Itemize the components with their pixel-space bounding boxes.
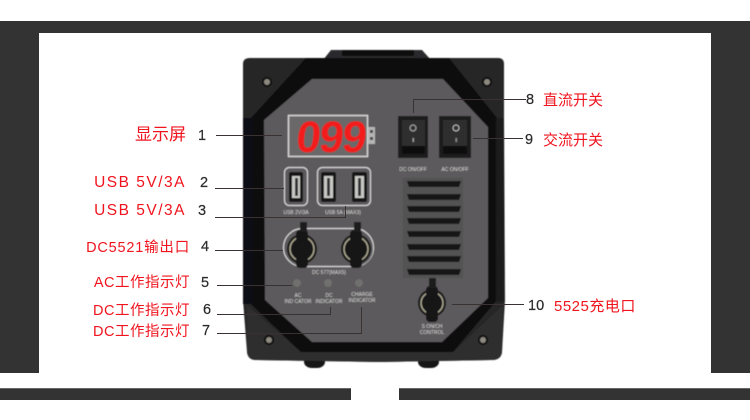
indicator labels: INDICATOR: [348, 298, 376, 304]
USB labels: [283, 210, 361, 216]
bottom left bar: [0, 388, 351, 400]
label 9: AC switch: 9: [525, 132, 533, 148]
charge socket label: S ON/CH: [422, 324, 443, 330]
label 2: USB: 2: [200, 175, 208, 191]
screws: [263, 78, 491, 344]
label 5: AC indicator: AC工作指示灯: [94, 274, 190, 291]
DC socket label: DC 577(MAX5): [312, 270, 346, 276]
label 8: DC switch: 8: [526, 92, 534, 108]
indicator lights: [293, 279, 363, 287]
power station device: [243, 50, 505, 368]
label 6: DC indicator: 6: [203, 302, 211, 318]
DC sockets: [284, 222, 374, 268]
USB labels: USB 2V/3A: [283, 210, 309, 216]
indicator labels: IND CATOR: [284, 299, 312, 305]
label 3: USB: USB 5V/3A: [94, 202, 186, 219]
USB labels: USB 5A (MAX3): [325, 210, 361, 216]
indicator labels: INDICATOR: [315, 299, 343, 305]
indicator labels: [284, 292, 376, 305]
indicator labels: DC: [325, 293, 333, 299]
body shell: [243, 58, 505, 362]
feet: [304, 356, 439, 368]
grey front panel: [264, 79, 488, 342]
right rim: [496, 118, 504, 302]
charge socket label: CONTROL: [420, 330, 444, 336]
ventilation grille: [403, 178, 463, 278]
digital display: 099: [294, 113, 368, 162]
label 4: DC output: DC5521输出口: [86, 239, 190, 256]
switch: AC: [439, 116, 471, 158]
charge socket: [418, 278, 446, 322]
label 3: USB: 3: [198, 203, 206, 219]
switch labels: AC ON/OFF: [441, 167, 469, 173]
USB single port: [284, 168, 308, 206]
indicator labels: AC: [295, 293, 302, 299]
label 5: AC indicator: 5: [201, 275, 209, 291]
left black rim: [243, 118, 253, 304]
black bezel: [251, 58, 497, 352]
leader lines: [215, 100, 526, 334]
label 4: DC output: 4: [201, 239, 209, 255]
switch labels: DC ON/OFF: [399, 167, 427, 173]
USB dual port: [318, 168, 370, 206]
label 1: display: 显示屏: [135, 125, 186, 144]
label 7: DC indicator: DC工作指示灯: [93, 323, 190, 340]
label 6: DC indicator: DC工作指示灯: [93, 302, 190, 319]
switch: DC: [398, 116, 428, 158]
charge socket label: [420, 324, 444, 336]
label 10: charge port: 10: [528, 298, 544, 314]
indicator labels: CHARGE: [351, 292, 373, 298]
bottom right bar: [399, 388, 750, 400]
label 9: AC switch: 交流开关: [543, 131, 603, 149]
handle: [323, 50, 431, 60]
switch labels: [399, 167, 469, 173]
label 8: DC switch: 直流开关: [543, 92, 603, 109]
label 1: display: 1: [198, 128, 206, 144]
label 2: USB: USB 5V/3A: [94, 174, 186, 191]
label 10: charge port: 5525充电口: [554, 298, 636, 315]
lower shell corners: [247, 305, 503, 362]
label 7: DC indicator: 7: [202, 323, 210, 339]
